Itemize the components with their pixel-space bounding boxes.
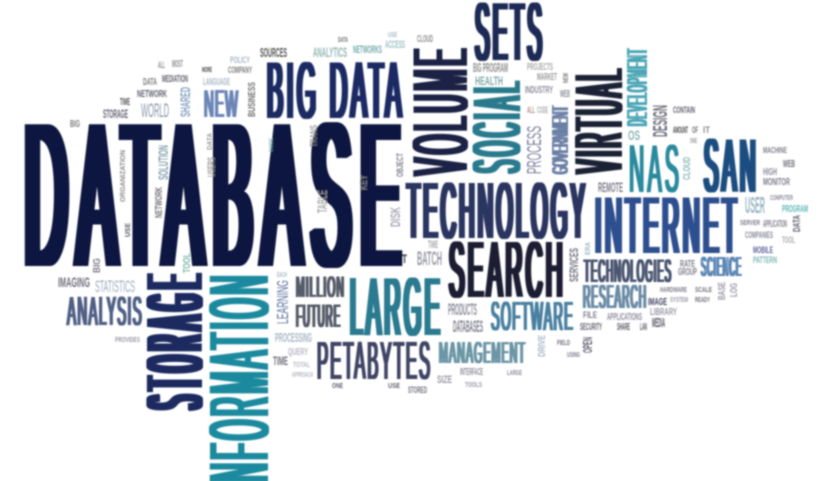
small vertical words: CLOUD	[682, 157, 693, 180]
small horizontal words: SYSTEM	[670, 297, 688, 304]
small horizontal words: HIGH	[763, 167, 777, 178]
small horizontal words: WEB	[560, 89, 570, 100]
small horizontal words: APPLICATIONS	[607, 312, 642, 323]
small horizontal words: INDUSTRY	[525, 85, 553, 96]
all words: WORLD	[141, 101, 169, 122]
small horizontal words: IMAGE	[648, 297, 667, 308]
small horizontal words: NETWORK	[137, 89, 167, 100]
small horizontal words: RATE	[680, 259, 695, 270]
small vertical words: DESIGN	[650, 105, 672, 137]
small vertical words: USE	[125, 223, 132, 237]
all words: GOVERNMENT	[547, 106, 573, 174]
small horizontal words: NETWORKS	[353, 44, 382, 56]
small horizontal words: READY	[695, 297, 710, 304]
small vertical words: TRANS	[309, 125, 320, 147]
small horizontal words: PROCESSING	[275, 330, 312, 345]
small horizontal words: DATABASES	[453, 317, 483, 336]
small horizontal words: CLOUD	[417, 34, 433, 45]
all words: LARGE	[350, 260, 443, 353]
small horizontal words: DATA	[338, 37, 348, 44]
small horizontal words: HARDWARE	[660, 287, 687, 294]
small vertical words: LOG	[729, 283, 740, 297]
small horizontal words: COMPUTER	[770, 195, 793, 202]
small horizontal words: ANALYTICS	[313, 44, 347, 60]
small horizontal words: HEALTH	[475, 74, 503, 88]
small horizontal words: COMPANY	[228, 65, 252, 75]
all words: FUTURE	[296, 298, 341, 334]
all words: NEW	[204, 83, 239, 126]
small horizontal words: ALL	[527, 105, 535, 115]
small vertical words: SHARED	[177, 87, 193, 117]
small vertical words: DRIVE	[537, 335, 548, 357]
small horizontal words: OF	[692, 125, 698, 135]
small horizontal words: PRODUCTS	[448, 300, 477, 319]
small vertical words: ORGANIZATION	[120, 150, 127, 202]
small horizontal words: DATA	[143, 77, 157, 88]
small horizontal words: ACCESS	[385, 39, 405, 51]
small vertical words: USERS	[206, 157, 218, 177]
small horizontal words: SCALE	[695, 287, 712, 294]
small horizontal words: USING	[567, 352, 580, 359]
small vertical words: KEY	[359, 175, 370, 190]
small horizontal words: CODE	[537, 105, 548, 115]
small vertical words: TOOL	[182, 253, 193, 273]
small horizontal words: QUERY	[288, 347, 308, 358]
small horizontal words: PROVIDES	[115, 337, 140, 344]
word: LEARNING: LEARNING	[275, 280, 292, 324]
small horizontal words: INTERFACE	[460, 367, 483, 378]
small vertical words: SOLUTION	[155, 145, 171, 180]
small horizontal words: SHARE	[617, 322, 630, 333]
small horizontal words: EACH	[277, 272, 287, 279]
small vertical words: BUSINESS	[247, 82, 258, 117]
all words: PROCESS	[524, 126, 546, 174]
small horizontal words: MACHINE	[763, 146, 787, 155]
small horizontal words: ONE	[690, 138, 697, 145]
small horizontal words: ALL	[158, 60, 165, 70]
small horizontal words: COMPANIES	[745, 230, 773, 240]
small horizontal words: OS	[628, 127, 640, 143]
small horizontal words: POLICY	[230, 55, 250, 65]
small horizontal words: BATCH	[417, 249, 442, 270]
small horizontal words: TIME	[428, 239, 438, 251]
small horizontal words: TIME	[273, 354, 288, 368]
all words: MILLION	[296, 271, 345, 304]
small vertical words: ERA	[585, 242, 592, 255]
small horizontal words: APPROACH	[292, 372, 313, 379]
small horizontal words: SOURCES	[260, 45, 287, 60]
small horizontal words: AMOUNT	[673, 125, 688, 135]
small vertical words: NETWORK	[154, 187, 165, 218]
small horizontal words: CONTAIN	[673, 105, 695, 115]
small horizontal words: MOST	[172, 59, 183, 70]
small horizontal words: LARGE	[507, 370, 522, 377]
small horizontal words: MONITOR	[763, 177, 790, 188]
small horizontal words: IT	[400, 252, 407, 266]
all words: PETABYTES	[317, 331, 432, 391]
small horizontal words: STORAGE	[103, 107, 128, 121]
small horizontal words: SECURITY	[580, 322, 602, 333]
small vertical words: DATA	[792, 215, 803, 232]
small horizontal words: PATTERN	[753, 255, 777, 265]
all words: BIG DATA	[267, 46, 405, 136]
small horizontal words: USER	[745, 192, 765, 218]
small horizontal words: SERVER	[740, 220, 760, 227]
small horizontal words: SIZE	[437, 374, 452, 386]
small horizontal words: IMAGING	[58, 274, 90, 290]
small horizontal words: PROJECTS	[527, 62, 553, 73]
small horizontal words: STORED	[408, 385, 427, 395]
small vertical words	[92, 73, 803, 357]
small vertical words: BASE	[717, 282, 728, 300]
small horizontal words: TOOLS	[465, 382, 482, 389]
small horizontal words: MEDIA	[652, 315, 665, 330]
all words: NAS	[629, 131, 682, 207]
small horizontal words: USE	[388, 32, 397, 39]
small vertical words: BIG	[92, 258, 103, 273]
small horizontal words: WEB	[783, 159, 795, 170]
small horizontal words: USE	[388, 383, 400, 390]
small horizontal words: ONE	[332, 383, 343, 390]
small vertical words: DISK	[387, 207, 403, 227]
small horizontal words: LANGUAGE	[203, 77, 230, 88]
all words: MANAGEMENT	[439, 335, 526, 370]
small horizontal words: TIME	[120, 97, 130, 108]
small horizontal words: BIG PROGRAM	[473, 60, 508, 75]
small horizontal words: MOBILE	[753, 245, 773, 255]
small horizontal words: BIG	[70, 119, 80, 130]
small horizontal words: FILE	[583, 310, 597, 320]
small vertical words: NEW	[563, 73, 570, 83]
small horizontal words: IT	[703, 125, 710, 135]
small vertical words: SERVICES	[567, 248, 581, 282]
small vertical words: TABLE	[314, 190, 330, 213]
all words: RESEARCH	[583, 278, 647, 315]
all words: ANALYSIS	[67, 288, 143, 334]
small horizontal words	[58, 32, 808, 395]
small vertical words: OPEN	[580, 337, 595, 353]
small horizontal words: STATISTICS	[95, 277, 135, 296]
small horizontal words: LIBRARY	[650, 307, 677, 318]
small horizontal words: FIELD	[557, 340, 570, 347]
small horizontal words: MEDIATION	[162, 74, 188, 85]
small horizontal words: TOTAL	[293, 362, 311, 369]
small horizontal words: TOOL	[782, 235, 795, 245]
small vertical words: CODE	[269, 137, 275, 152]
all words: SOFTWARE	[491, 293, 574, 339]
small horizontal words: LAN	[640, 322, 647, 333]
small vertical words: DATA	[207, 133, 214, 150]
small horizontal words: MORE	[202, 67, 212, 74]
small horizontal words: MARKET	[537, 72, 557, 83]
small horizontal words: REMOTE	[598, 179, 623, 195]
small vertical words: OBJECT	[395, 153, 405, 177]
small horizontal words: GROUP	[678, 267, 697, 278]
